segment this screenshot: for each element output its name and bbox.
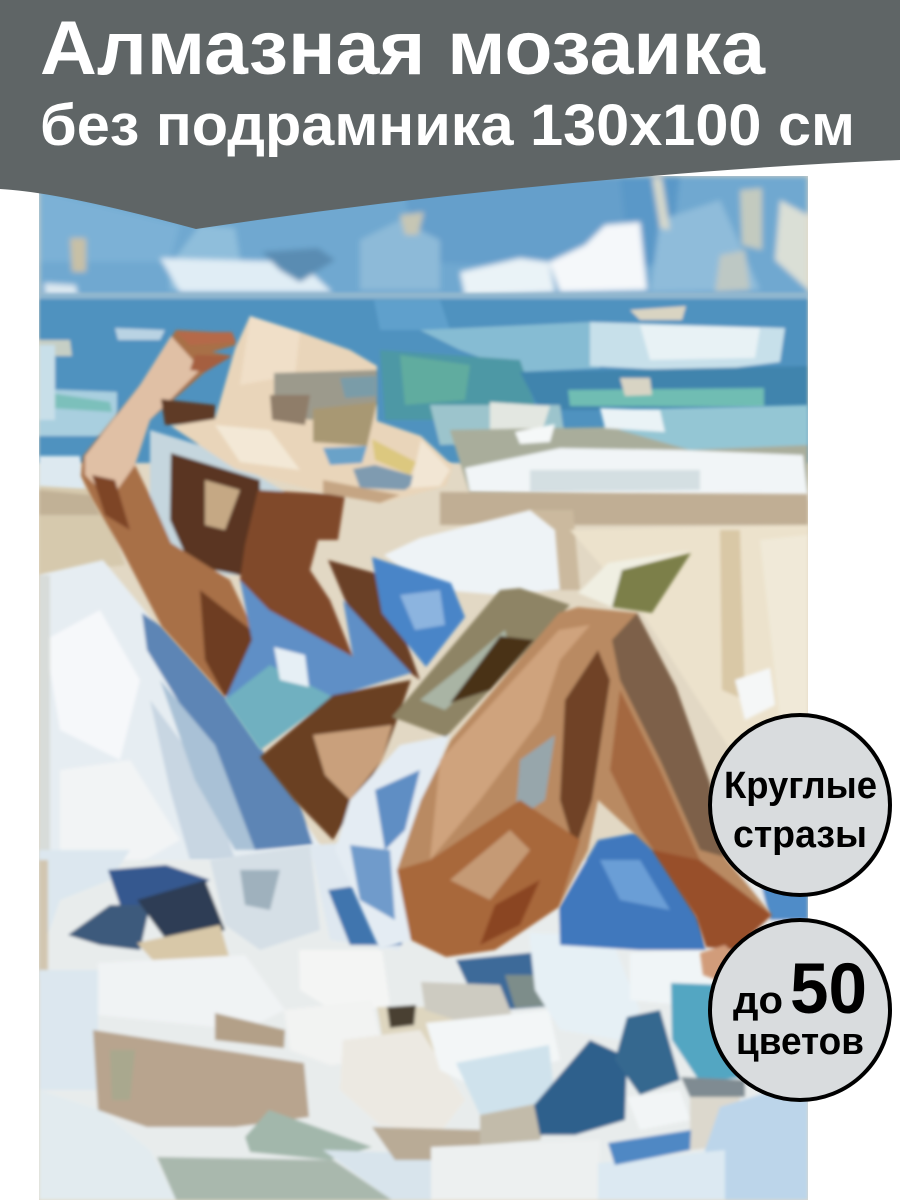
surf foam (39, 405, 808, 500)
face and neck (240, 490, 353, 657)
badge: up to 50 colours: цветов (736, 1021, 864, 1063)
pillow behind the book (384, 510, 560, 595)
book (392, 550, 691, 737)
header banner (0, 0, 900, 229)
badge: up to 50 colours (710, 920, 890, 1100)
sea (39, 293, 808, 463)
blue drape (372, 557, 465, 667)
painting: woman reading on the beach (39, 176, 808, 1200)
sand (39, 484, 808, 746)
raised legs (397, 607, 772, 983)
hair (150, 430, 290, 575)
title: Алмазная мозаика (40, 6, 766, 91)
lounger cushion (39, 558, 320, 862)
badge: round rhinestones (710, 715, 890, 895)
subtitle: без подрамника 130х100 см (40, 93, 855, 158)
shoulder and chest skin (328, 560, 420, 680)
badge: round rhinestones: Круглые (724, 765, 877, 807)
woman figure (81, 316, 772, 983)
badge: round rhinestones: стразы (733, 814, 867, 856)
badge: up to 50 colours: 50 (790, 950, 867, 1029)
skirt at hips (335, 735, 450, 950)
straw hat (171, 316, 453, 503)
sky (39, 176, 808, 297)
blue bikini (225, 580, 411, 750)
bottom drapery, blue and white palette knife strokes (39, 830, 808, 1200)
badge: up to 50 colours: до (733, 980, 783, 1022)
raised arm and hand (81, 330, 255, 697)
belly (260, 680, 411, 840)
